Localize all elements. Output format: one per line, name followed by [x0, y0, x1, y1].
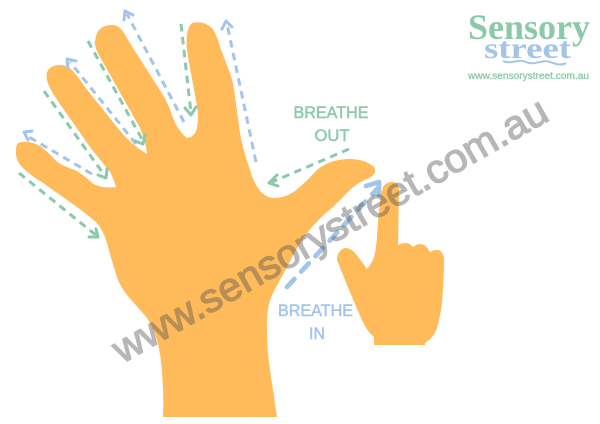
watermark: www.sensorystreet.com.au — [104, 89, 556, 372]
arrow: breathe in along pinky — [24, 131, 92, 174]
arrow: index finger in — [222, 21, 256, 162]
arrow: ring finger out — [44, 91, 107, 178]
arrow: middle finger in — [124, 11, 184, 122]
arrow: index finger out — [181, 24, 196, 115]
icon: large open hand — [16, 22, 375, 417]
arrow: breathe out to thumb base — [269, 149, 349, 186]
logo: Sensory Street: Sensory — [468, 7, 590, 47]
arrow: ring finger in — [67, 59, 136, 144]
arrow: breathe out pinky outer edge — [19, 173, 98, 237]
heading: breathe in: BREATHE — [278, 301, 353, 320]
icon: pointing hand — [337, 182, 444, 345]
logo: Sensory Street: street — [484, 32, 571, 65]
heading: in: IN — [309, 324, 325, 343]
arrow: breathe in along thumb — [287, 182, 379, 287]
heading: breathe out: BREATHE — [294, 103, 368, 122]
heading: out: OUT — [314, 126, 350, 145]
logo: Sensory Street — [467, 7, 590, 82]
logo: Sensory Street: www.sensorystreet.com.au — [467, 71, 589, 82]
arrow: middle finger out — [88, 41, 145, 144]
